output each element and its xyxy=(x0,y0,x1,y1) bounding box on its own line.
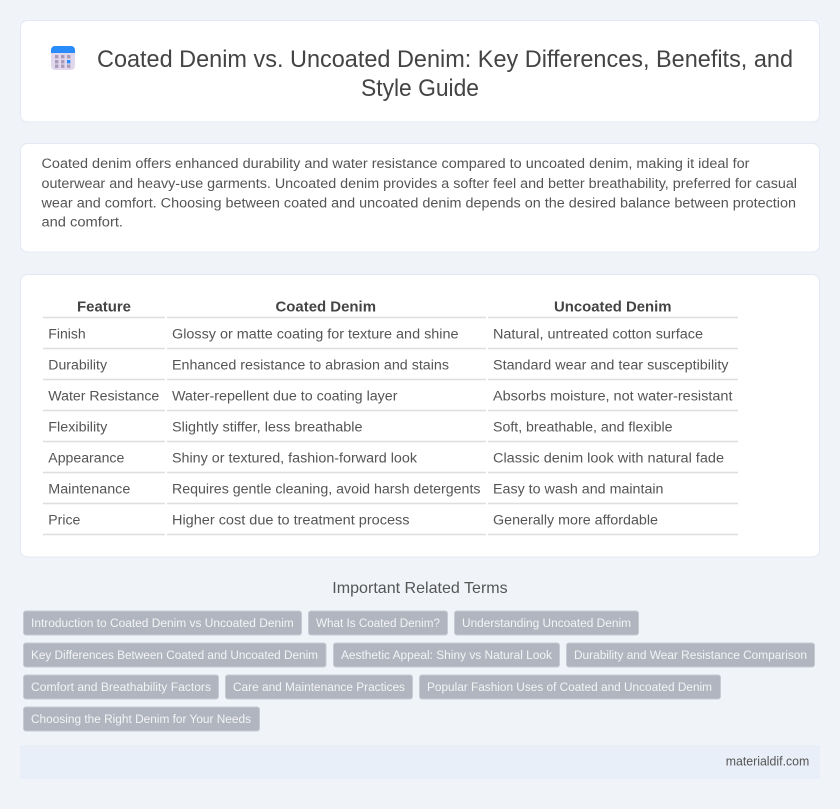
table row: finish xyxy=(43,326,738,348)
table row: maintenance xyxy=(43,482,738,504)
panel: header xyxy=(20,20,820,122)
panel: related term tags: Choosing the Right Denim for Your Needs xyxy=(31,712,251,726)
panel: comparison table xyxy=(20,274,820,557)
footer: materialdif.com xyxy=(726,754,809,769)
panel: related term tags: Key Differences Between Coated and Uncoated Denim xyxy=(31,648,318,662)
title: Style Guide xyxy=(361,75,479,102)
panel: related term tags: What Is Coated Denim? xyxy=(316,616,440,630)
panel: related term tags: Care and Maintenance Practices xyxy=(233,680,405,694)
icon: calendar xyxy=(51,46,75,70)
table row: flexibility xyxy=(43,420,738,442)
table row: finish: Finish xyxy=(48,326,86,342)
panel: introduction xyxy=(20,144,820,252)
table row: water resistance: Absorbs moisture, not water-resistant xyxy=(493,388,733,404)
table row: finish: Glossy or matte coating for texture and shine xyxy=(172,326,459,342)
text block: introduction paragraph: outerwear and heavy-use garments. Uncoated denim provides a softer feel and better breathability, preferred for casual xyxy=(42,176,797,192)
table row: price: Generally more affordable xyxy=(493,512,658,528)
table row: appearance xyxy=(43,450,738,472)
table row: price: Price xyxy=(48,512,80,528)
table row: finish: Natural, untreated cotton surface xyxy=(493,326,703,342)
table row: durability xyxy=(43,358,738,380)
table row: maintenance: Requires gentle cleaning, avoid harsh detergents xyxy=(172,482,480,498)
panel: related term tags: Popular Fashion Uses of Coated and Uncoated Denim xyxy=(427,680,712,694)
text block: introduction paragraph: and comfort. xyxy=(42,214,123,230)
table row: durability: Standard wear and tear susceptibility xyxy=(493,358,729,374)
table header row: Feature xyxy=(77,300,131,316)
panel: related term tags: Understanding Uncoated Denim xyxy=(462,616,631,630)
table row: water resistance xyxy=(43,388,738,410)
text block: introduction paragraph xyxy=(40,156,797,230)
table header row: Coated Denim xyxy=(276,300,376,316)
title xyxy=(97,46,793,102)
table row: flexibility: Slightly stiffer, less breathable xyxy=(172,420,363,436)
text block: introduction paragraph: Coated denim offers enhanced durability and water resistance compared to uncoated denim, making it ideal for xyxy=(42,156,750,172)
table row: durability: Enhanced resistance to abrasion and stains xyxy=(172,358,449,374)
heading: important related terms: Important Related Terms xyxy=(332,580,508,597)
table header row xyxy=(43,300,738,318)
table row: maintenance: Maintenance xyxy=(48,482,130,498)
table row: price xyxy=(43,512,738,534)
table row: water resistance: Water-repellent due to coating layer xyxy=(172,388,398,404)
text block: introduction paragraph: wear and comfort. Choosing between coated and uncoated denim depends on the desired balance between protection xyxy=(40,196,796,212)
panel: related term tags: Comfort and Breathability Factors xyxy=(31,680,211,694)
table row: appearance: Appearance xyxy=(48,450,124,466)
table row: flexibility: Soft, breathable, and flexible xyxy=(493,420,673,436)
title: Coated Denim vs. Uncoated Denim: Key Differences, Benefits, and xyxy=(97,46,793,73)
table header row: Uncoated Denim xyxy=(554,300,672,316)
table row: durability: Durability xyxy=(48,358,108,374)
table row: flexibility: Flexibility xyxy=(48,420,108,436)
panel: related term tags: Aesthetic Appeal: Shiny vs Natural Look xyxy=(341,648,553,662)
panel: related term tags: Introduction to Coated Denim vs Uncoated Denim xyxy=(31,616,294,630)
table row: maintenance: Easy to wash and maintain xyxy=(493,482,664,498)
table row: water resistance: Water Resistance xyxy=(48,388,159,404)
footer xyxy=(20,745,820,779)
panel: related term tags: Durability and Wear Resistance Comparison xyxy=(574,648,807,662)
panel: related term tags xyxy=(24,611,814,731)
table row: appearance: Classic denim look with natural fade xyxy=(493,450,724,466)
table row: price: Higher cost due to treatment process xyxy=(172,512,410,528)
table row: appearance: Shiny or textured, fashion-forward look xyxy=(172,450,418,466)
